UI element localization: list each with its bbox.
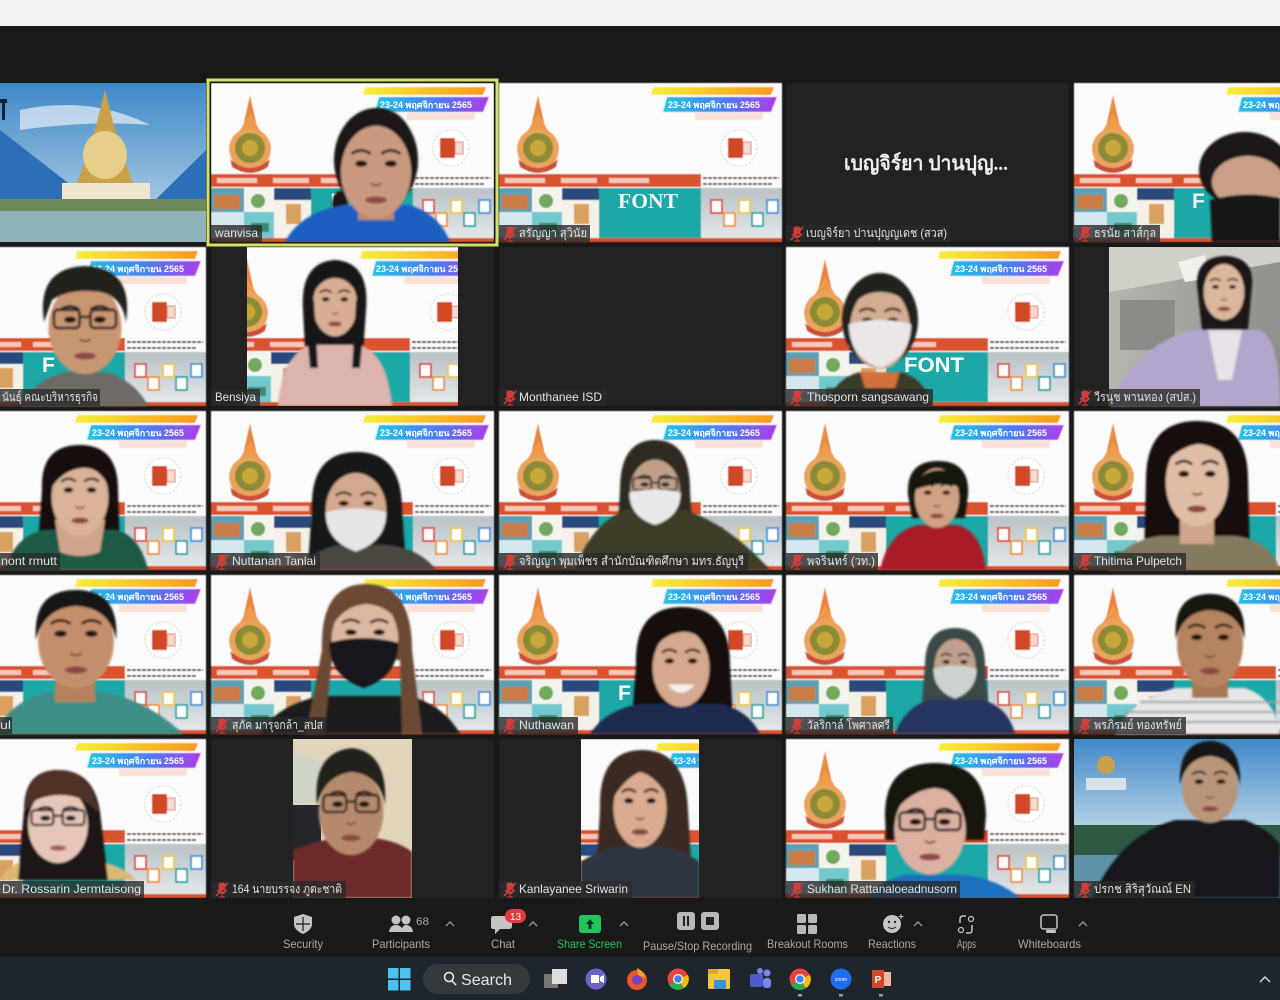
tile: name only — [786, 83, 1069, 242]
name label: Dr. Rossarin Jermtaisong — [2, 882, 141, 896]
person — [581, 750, 699, 898]
person — [1092, 741, 1280, 898]
name label: สุภัค มารุจกล้า_สปส — [232, 718, 324, 733]
tile: building photo — [0, 83, 206, 242]
tile: name only: เบญจิร์ยา ปานปุญ... — [844, 152, 1008, 176]
name label: พจรินทร์ (วท.) — [807, 554, 875, 568]
room background — [293, 739, 412, 898]
person — [278, 260, 392, 406]
participants button: 68 — [416, 916, 429, 928]
name label — [786, 553, 878, 570]
name label: จริญญา พุมเพ็ชร สำนักบัณฑิตศึกษา มทร.ธัญบุรี — [519, 553, 744, 569]
person — [880, 461, 986, 570]
tile: striped shirt man — [1074, 575, 1280, 734]
name label — [499, 881, 632, 898]
tile: slide with FONT: 23-24 พฤศจิกายน 2565 — [668, 100, 760, 110]
person — [20, 266, 148, 406]
name label: Thosporn sangsawang — [807, 390, 929, 404]
name label: Bensiya — [215, 390, 256, 404]
breakout rooms button: Breakout Rooms — [767, 937, 848, 951]
office photo — [1109, 247, 1280, 406]
tile: Monthanee ISD — [499, 247, 782, 406]
person — [590, 607, 760, 734]
name label: wanvisa — [214, 226, 258, 240]
name label — [786, 389, 933, 406]
whiteboards button — [1018, 915, 1087, 951]
icon: zoom: zoom — [835, 977, 847, 983]
tile: Bensiya: 23-24 พฤศจิกายน 2565 — [376, 264, 468, 274]
tile: wanvisa — [208, 80, 497, 245]
tile: Kanlayanee — [499, 739, 787, 898]
tile: Sukhan: 23-24 พฤศจิกายน 2565 — [955, 756, 1047, 766]
name label — [786, 717, 893, 734]
icon: file explorer — [708, 969, 730, 989]
person — [1110, 256, 1280, 406]
search box: Search — [461, 972, 512, 989]
name label — [211, 717, 327, 734]
tile: Nuthawan — [499, 575, 782, 734]
tile: Thosporn: 23-24 พฤศจิกายน 2565 — [955, 264, 1047, 274]
name label — [499, 389, 606, 406]
person — [1115, 594, 1280, 734]
tile: man in teal — [0, 575, 206, 734]
icon: firefox — [627, 968, 647, 990]
icon: chat app — [586, 968, 606, 990]
tile: red shirt woman: 23-24 พฤศจิกายน 2565 — [955, 428, 1047, 438]
name label: วีรนุช พานทอง (สปส.) — [1094, 390, 1196, 405]
tile: long-name veiled participant — [499, 411, 782, 570]
name label: Monthanee ISD — [519, 390, 602, 404]
tile: lake background — [1074, 739, 1280, 898]
pause stop recording button — [643, 912, 752, 953]
tile: slide with FONT: FONT — [618, 189, 678, 213]
name label — [1074, 225, 1160, 242]
person — [5, 445, 148, 570]
tile: Dr. Rossarin — [0, 739, 206, 898]
participants button — [372, 916, 454, 951]
tile: masked participant top right — [1074, 83, 1280, 242]
tile: black mask woman — [211, 575, 494, 734]
icon: windows start — [388, 968, 410, 990]
tile: Sukhan — [786, 739, 1069, 898]
tile: slide with FONT — [499, 83, 782, 242]
name label: พรภิรมย์ ทองทรัพย์ — [1094, 718, 1182, 732]
icon: zoom — [830, 968, 852, 996]
name label — [1074, 389, 1200, 406]
name label: Kanlayanee Sriwarin — [519, 882, 628, 896]
icon: chrome — [668, 968, 689, 990]
name label: ธรนัย สาส์กุล — [1094, 226, 1156, 241]
search box — [423, 964, 530, 994]
reactions button — [868, 914, 922, 951]
tile: Thosporn — [786, 247, 1069, 406]
name label — [1074, 717, 1186, 734]
chat button with badge: 13 — [510, 912, 521, 923]
tile: red shirt woman — [786, 411, 1069, 570]
name label: ปรกช สิริสุวัณณ์ EN — [1094, 882, 1191, 897]
icon: teams — [750, 968, 771, 988]
name label: Sukhan Rattanaloeadnusorn — [807, 882, 957, 896]
apps button: Apps — [957, 937, 976, 951]
name label: 164 นายบรรจง ภูตะชาติ — [232, 882, 342, 897]
reactions button: Reactions — [868, 937, 916, 951]
person — [575, 440, 770, 570]
person — [300, 452, 436, 570]
tile: navy mask woman — [786, 575, 1069, 734]
tile: Bensiya — [208, 247, 494, 406]
person — [0, 590, 183, 734]
name label — [211, 553, 320, 570]
icon: powerpoint — [872, 970, 891, 996]
name label — [499, 717, 578, 734]
tile: nont rmutt: 23-24 พฤศจิกายน 2565 — [92, 428, 184, 438]
tile: Nuttanan — [211, 411, 494, 570]
share screen button: Share Screen — [557, 937, 622, 951]
name label: Nuthawan — [519, 718, 574, 732]
tile: man with glasses — [0, 247, 206, 406]
name label: ul — [0, 718, 11, 732]
person — [293, 748, 412, 898]
apps button — [957, 916, 976, 951]
tile: man in teal: 23-24 พฤศจิกายน 2565 — [92, 592, 184, 602]
name label: วัลริกาล์ โพศาลศรี — [807, 718, 890, 732]
tile: wanvisa: FONT — [330, 190, 390, 213]
name label: สรัญญา สุวินัย — [519, 226, 587, 241]
tile: Kanlayanee: 23-24 พฤศจิกายน 2565 — [673, 756, 765, 766]
security button — [283, 914, 323, 951]
tile: Nuthawan: 23-24 พฤศจิกายน 2565 — [668, 592, 760, 602]
person — [895, 628, 1015, 734]
icon: powerpoint: P — [875, 975, 882, 986]
name label — [499, 225, 590, 242]
tile: man with glasses: 23-24 พฤศจิกายน 2565 — [92, 264, 184, 274]
name label — [211, 881, 346, 898]
icon: chrome second — [790, 968, 811, 996]
tile: Thosporn: FONT — [904, 354, 964, 377]
top window bar — [0, 0, 1280, 26]
name label: นันธุ์ คณะบริหารธุรกิจ — [2, 390, 98, 405]
person — [0, 770, 136, 880]
tile: masked participant top right: F — [1192, 190, 1205, 213]
name label: Nuttanan Tanlai — [232, 554, 316, 568]
windows taskbar — [0, 957, 1280, 1000]
icon: task view — [544, 969, 567, 988]
tile: Nuthawan: F — [618, 682, 631, 705]
name label: เบญจิร์ยา ปานปุญญเดช (สวส) — [806, 226, 947, 241]
whiteboards button: Whiteboards — [1018, 937, 1081, 951]
name label — [1074, 553, 1186, 570]
tile: Nuttanan: 23-24 พฤศจิกายน 2565 — [380, 428, 472, 438]
person: wanvisa — [285, 108, 450, 242]
name label — [1074, 881, 1195, 898]
participants button: Participants — [372, 937, 430, 951]
tile: office woman — [1074, 247, 1280, 406]
breakout rooms button — [767, 914, 848, 951]
name label — [786, 225, 950, 242]
tile: long-name veiled participant: 23-24 พฤศจิกายน 2565 — [668, 428, 760, 438]
person — [826, 273, 932, 406]
person — [1108, 421, 1280, 570]
icon: tray chevron — [1260, 977, 1270, 982]
tile: wanvisa: 23-24 พฤศจิกายน 2565 — [380, 100, 472, 110]
chat button with badge — [491, 909, 537, 951]
person — [868, 763, 1020, 898]
person — [1199, 132, 1280, 242]
tile: nont rmutt — [0, 411, 206, 570]
name label: Thitima Pulpetch — [1094, 554, 1182, 568]
share screen button — [557, 915, 628, 951]
tile: man with glasses: F — [42, 354, 55, 377]
lake photo — [1074, 739, 1280, 898]
pause stop recording button: Pause/Stop Recording — [643, 939, 752, 953]
tile: man in maroon — [211, 739, 494, 898]
person — [260, 584, 460, 734]
meeting toolbar — [0, 898, 1280, 957]
chat button with badge: Chat — [491, 937, 516, 951]
security button: Security — [283, 937, 323, 951]
name label — [0, 717, 12, 734]
tile: navy mask woman: 23-24 พฤศจิกายน 2565 — [955, 592, 1047, 602]
tile: Thitima — [1074, 411, 1280, 570]
tile: Dr. Rossarin: 23-24 พฤศจิกายน 2565 — [92, 756, 184, 766]
tile: black mask woman: 23-24 พฤศจิกายน 2565 — [380, 592, 472, 602]
name label: nont rmutt — [1, 554, 58, 568]
